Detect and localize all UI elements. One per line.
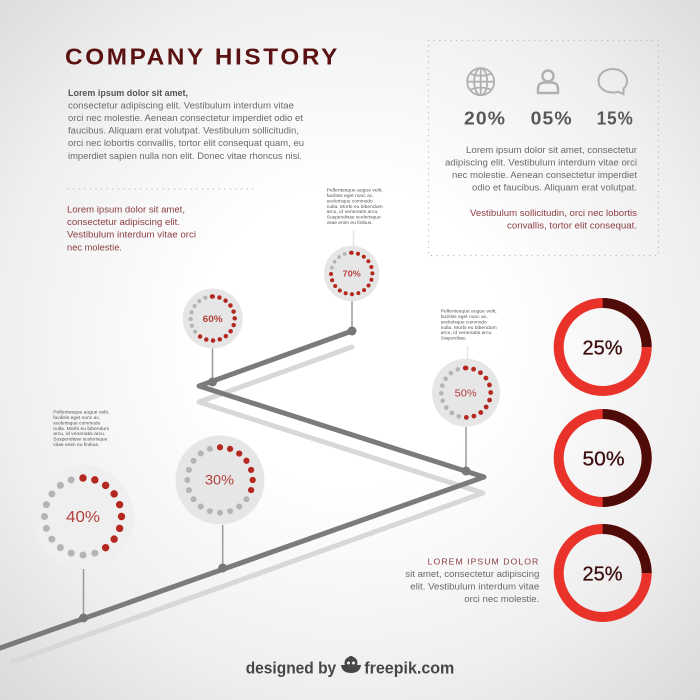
icon: freepik mascot (341, 656, 361, 673)
donut caption: orci nec molestie. (464, 594, 539, 604)
intro text block: orci nec lobortis convallis, tortor elit consequat quam, eu (68, 138, 304, 148)
note: 70%: nulla. Morbi eu bibendum (327, 204, 383, 210)
note: 70%: arcu, id venenatis arcu. (327, 209, 379, 215)
footer credit (246, 656, 454, 678)
gauge: 30% (176, 436, 264, 524)
stat: 05%: 05% (531, 108, 573, 128)
note: 70%: scelerisque commodo (327, 198, 373, 204)
note: 50% (441, 308, 497, 342)
note: 70%: Pellentesque augue velit, (327, 188, 383, 194)
note: 50%: arcu, id venenatis arcu. (441, 330, 493, 336)
donut: 50% (559, 414, 647, 502)
note: 70%: vitae enim eu finibus. (327, 220, 373, 226)
note: 50%: nulla. Morbi eu bibendum (441, 325, 497, 331)
icon: speech bubble (598, 69, 627, 94)
donut: 25% bottom (559, 529, 647, 617)
red text block: Lorem ipsum dolor sit amet, (67, 204, 185, 214)
stems (84, 230, 468, 618)
note: 40%: nulla. Morbi eu bibendum (53, 426, 109, 432)
panel text (445, 145, 638, 192)
note: 70%: facilisis eget nunc ac, (327, 193, 374, 199)
intro text block: Lorem ipsum dolor sit amet, (68, 88, 188, 98)
panel red text: convallis, tortor elit consequat. (507, 220, 637, 230)
intro text block: faucibus. Aliquam erat volutpat. Vestibulum sollicitudin, (68, 126, 299, 136)
note: 40% (53, 410, 109, 448)
red text block: nec molestie. (67, 242, 122, 252)
note: 40%: arcu, id venenatis arcu. (53, 431, 105, 437)
footer credit: designed by (246, 660, 337, 678)
intro text block (68, 88, 304, 161)
gauge: 40% (32, 466, 134, 568)
stat: 20%: 20% (464, 108, 506, 128)
donut caption: elit. Vestibulum interdum vitae (410, 582, 539, 592)
note: 40%: Pellentesque augue velit, (53, 410, 109, 416)
panel red text (470, 208, 638, 230)
gauge: 70%: 70% (343, 268, 361, 278)
gauge: 60%: 60% (203, 314, 223, 325)
panel text: nec molestie. Aenean consectetur imperdiet (452, 170, 638, 180)
note: 40%: vitae enim eu finibus. (53, 442, 99, 448)
donut caption (405, 556, 539, 604)
note: 40%: Suspendisse scelerisque (53, 437, 108, 443)
donut: 25% top: 25% (582, 338, 623, 360)
panel: statistics (428, 40, 658, 256)
note: 50%: facilisis eget nunc ac, (441, 314, 488, 320)
note: 50%: Pellentesque augue velit, (441, 308, 497, 314)
panel text: Lorem ipsum dolor sit amet, consectetur (466, 145, 637, 155)
panel text: adipiscing elit. Vestibulum interdum vitae orci (445, 158, 637, 168)
red text block: consectetur adipiscing elit. (67, 217, 180, 227)
panel text: odio et faucibus. Aliquam erat volutpat. (472, 182, 637, 192)
timeline nodes (79, 326, 470, 622)
donut: 25% bottom: 25% (582, 564, 623, 586)
donut: 25% top (559, 303, 647, 391)
intro text block: orci nec molestie. Aenean consectetur imperdiet odio et (68, 113, 304, 123)
gauge: 40%: 40% (66, 509, 100, 526)
panel red text: Vestibulum sollicitudin, orci nec lobortis (470, 208, 638, 218)
red text block (67, 204, 196, 252)
stat: 15%: 15% (597, 108, 634, 128)
intro text block: imperdiet sapien nulla non elit. Donec vitae rhoncus nisi. (68, 151, 302, 161)
icon: person (538, 70, 558, 93)
donut caption: sit amet, consectetur adipiscing (405, 569, 539, 579)
timeline line (0, 331, 484, 650)
footer credit: freepik.com (364, 660, 454, 678)
note: 70% (327, 188, 383, 226)
gauge: 60% (183, 288, 243, 348)
title: COMPANY HISTORY (65, 44, 340, 70)
gauge: 50%: 50% (455, 388, 477, 400)
gauge: 50% (432, 359, 500, 427)
note: 70%: Suspendisse scelerisque (327, 215, 381, 221)
donut caption: LOREM IPSUM DOLOR (428, 556, 539, 566)
red text block: Vestibulum interdum vitae orci (67, 230, 196, 240)
note: 50%: Suspendisse. (441, 336, 467, 342)
donut: 50%: 50% (582, 448, 625, 470)
note: 40%: facilisis eget nunc ac, (53, 415, 100, 421)
note: 40%: scelerisque commodo (53, 420, 101, 426)
note: 50%: scelerisque commodo (441, 319, 487, 325)
gauge: 30%: 30% (205, 472, 234, 488)
icon: globe (467, 68, 494, 95)
gauge: 70% (324, 246, 379, 301)
timeline shadow (12, 347, 483, 662)
intro text block: consectetur adipiscing elit. Vestibulum interdum vitae (68, 100, 294, 110)
